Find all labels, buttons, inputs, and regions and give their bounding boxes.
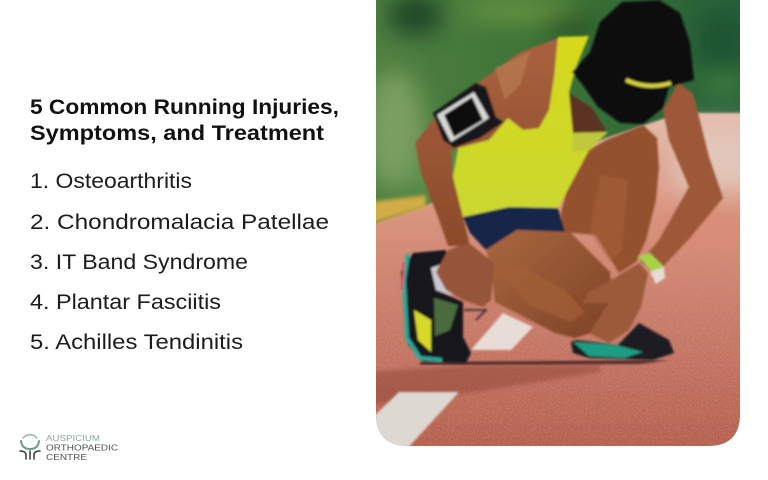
- green sports watch: [638, 253, 665, 284]
- white lane marking, bottom: [376, 390, 460, 446]
- logo wordmark: CENTRE: [46, 453, 87, 462]
- title: [30, 96, 339, 145]
- white lane marking, middle: [471, 313, 533, 350]
- her left arm: [640, 83, 723, 272]
- chest: [569, 93, 607, 133]
- right hand on knee: [583, 263, 648, 343]
- track shadow under runner: [370, 365, 600, 405]
- left shoe: [401, 250, 486, 363]
- armband with phone: [433, 83, 504, 148]
- blurred green background: [376, 0, 740, 224]
- logo wordmark: ORTHOPAEDIC: [46, 444, 118, 452]
- item 5: 5. Achilles Tendinitis: [30, 330, 243, 354]
- track speckle texture: [376, 266, 740, 446]
- yellow lane line: [370, 195, 426, 224]
- left hand gripping ankle: [436, 243, 494, 307]
- sock and ankle: [431, 262, 452, 295]
- item 1: 1. Osteoarthritis: [30, 169, 192, 193]
- navy shorts: [463, 207, 566, 250]
- item 4: 4. Plantar Fasciitis: [30, 290, 221, 314]
- title: Symptoms, and Treatment: [30, 122, 324, 145]
- dark hair: [572, 0, 694, 124]
- raised knee and shin: [561, 125, 659, 273]
- shoulder and upper arm: [415, 38, 558, 246]
- item 2: 2. Chondromalacia Patellae: [30, 210, 329, 234]
- bent thigh and calf: [486, 230, 614, 338]
- logo wordmark: AUSPICIUM: [46, 434, 100, 443]
- logo wordmark: [46, 434, 118, 462]
- face: [619, 97, 663, 122]
- logo: Auspicium Orthopaedic Centre: [20, 434, 118, 462]
- runner figure: [401, 0, 723, 363]
- list of injuries: [30, 169, 329, 354]
- running track surface: [376, 112, 740, 446]
- item 3: 3. IT Band Syndrome: [30, 250, 248, 274]
- yellow headband: [626, 80, 671, 86]
- right shoe: [571, 323, 674, 360]
- title: 5 Common Running Injuries,: [30, 96, 339, 119]
- logo icon: [20, 434, 40, 459]
- photo: runner holding her knee on a track: [376, 0, 740, 446]
- yellow tank top: [453, 36, 608, 217]
